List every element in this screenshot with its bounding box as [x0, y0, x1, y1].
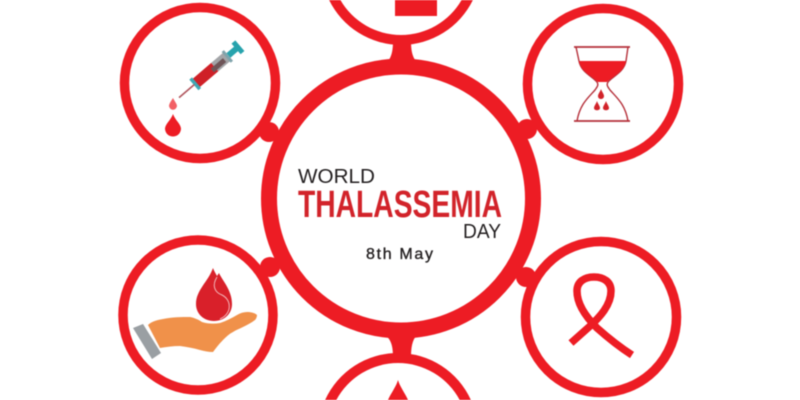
title text block: [298, 165, 502, 263]
central ring: [269, 66, 533, 330]
icon: hourglass with blood: [574, 47, 630, 121]
heading: THALASSEMIA: THALASSEMIA: [298, 184, 502, 226]
syringe circle: [124, 8, 276, 158]
bottom circle (cropped): [325, 353, 471, 400]
heading: WORLD: WORLD: [298, 165, 375, 188]
icon: blood drop (cropped): [388, 380, 408, 400]
hand and blood circle: [123, 240, 273, 390]
icon: syringe with blood drops: [165, 40, 244, 136]
hourglass circle: [528, 8, 678, 160]
heading: DAY: DAY: [463, 221, 501, 243]
date: 8th May: 8th May: [366, 246, 433, 263]
connector nodes: [259, 40, 537, 358]
icon: awareness ribbon: [571, 277, 632, 355]
icon: cropped red block: [395, 0, 437, 16]
ribbon circle: [526, 242, 676, 392]
top circle (cropped): [329, 0, 473, 45]
icon: hand holding blood drop: [133, 268, 257, 359]
